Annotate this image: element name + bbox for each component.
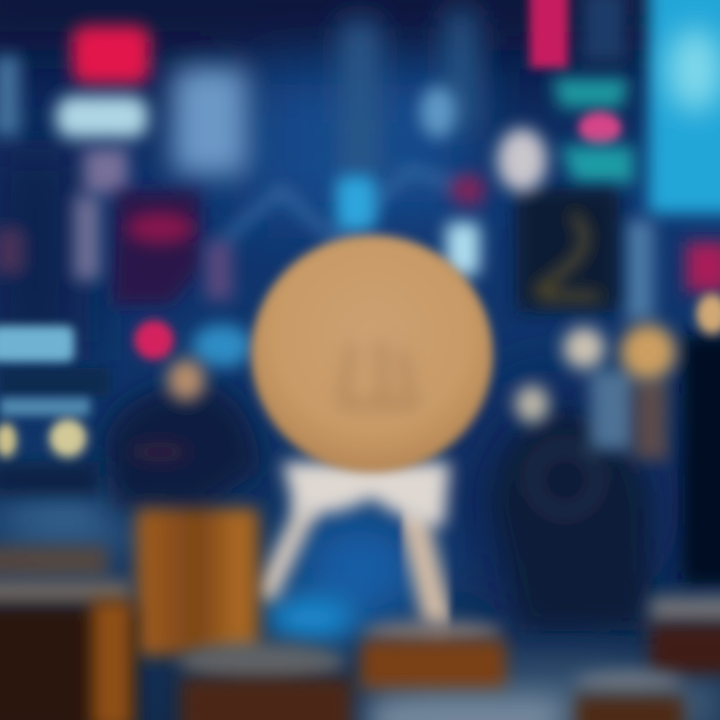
coin: faint central emblem <box>340 340 416 404</box>
sign: red right edge <box>686 242 720 292</box>
sign: bright patch on billboard <box>667 28 720 112</box>
sign: magenta glow in panel <box>126 212 194 244</box>
figure: body <box>104 384 262 510</box>
light: cyan behind coin <box>336 176 376 230</box>
sign: cyan billboard <box>648 0 720 214</box>
strip: lilac vertical <box>74 196 100 280</box>
band: light blue horizontal <box>0 398 90 416</box>
stack: right body <box>650 624 720 674</box>
building: left tower with neon signs <box>56 26 248 360</box>
glow: bright blue floor patch below coin <box>264 596 356 640</box>
strip: lilac lower panel <box>206 240 232 300</box>
figure: blue-grey coat <box>590 370 634 450</box>
head: tan <box>167 359 205 401</box>
sign: pale blue vertical block <box>172 66 248 176</box>
floor: pale bottom strip <box>370 700 560 720</box>
stack: bottom-right body <box>574 696 684 720</box>
stack: right lid <box>650 596 720 624</box>
sign: white-cyan bar <box>56 96 148 138</box>
shorts: white <box>282 462 450 526</box>
sign: pink small block <box>134 320 174 360</box>
light: blue left of coin <box>192 324 252 368</box>
light: pale blue top <box>420 86 456 138</box>
background: faint chart line <box>225 170 470 240</box>
character: golden coin body <box>251 235 493 473</box>
sign: pink centre <box>578 112 622 144</box>
band: dark below lights <box>0 462 100 496</box>
glyph: gold mark <box>536 214 600 296</box>
head: pale <box>563 327 605 369</box>
sign: pale pink block <box>84 148 128 194</box>
strip: pale vertical <box>624 220 654 320</box>
character: legs <box>268 462 450 620</box>
building: far-left edge signs <box>0 56 110 496</box>
stack: centre top <box>362 620 502 644</box>
stack: bottom-right lid <box>574 671 682 693</box>
figure: dark suit right <box>490 410 650 630</box>
head: gold <box>620 324 676 380</box>
stack: far-left lid <box>0 580 130 606</box>
figure: grey emblem <box>533 448 597 512</box>
sign: cyan horizontal bar <box>0 326 74 362</box>
glow: cyan lights above coin <box>192 86 486 368</box>
panel: dark sign with gold glyph <box>516 188 620 312</box>
sign: left blue edge <box>0 56 20 136</box>
head: pale small <box>515 385 549 423</box>
figure: far-right dark body <box>682 335 720 585</box>
stack: far-left top disc <box>0 546 108 576</box>
stack: centre-left lid <box>178 642 346 682</box>
light: pale cyan right of coin <box>446 222 480 276</box>
figure: maroon patch <box>130 440 190 464</box>
sign: crimson top <box>530 0 568 68</box>
building: central pale columns <box>340 10 477 180</box>
coin: disc <box>251 235 493 473</box>
leg: left <box>268 510 306 590</box>
light: warm left lamp <box>0 423 17 457</box>
figure: brown coat <box>634 380 668 460</box>
building: right tower with neon signs <box>516 0 720 320</box>
tower: dark maroon panel <box>112 190 200 305</box>
head: far-right tan <box>696 294 720 334</box>
stack: far-left body <box>0 606 134 720</box>
light: warm lamp <box>49 419 87 457</box>
sign: red neon top-left <box>72 26 150 84</box>
stack: centre body <box>360 640 506 690</box>
light: magenta <box>450 174 486 206</box>
sign: teal upper <box>552 78 630 108</box>
sign: teal lower <box>560 146 634 184</box>
figure: left dark suit <box>104 359 262 510</box>
figure: white ghost head upper right <box>497 128 547 192</box>
sign: maroon edge <box>0 228 24 274</box>
platforms: copper stacks foreground <box>0 508 720 720</box>
band: dark horizontal <box>0 368 110 396</box>
stack: far-left highlight <box>92 600 132 720</box>
stack: left tall coin stack <box>136 508 260 656</box>
figures: right crowd <box>490 294 720 630</box>
leg: right <box>414 520 438 620</box>
stack: centre-left body <box>180 678 352 720</box>
sign: dark column <box>582 0 626 62</box>
